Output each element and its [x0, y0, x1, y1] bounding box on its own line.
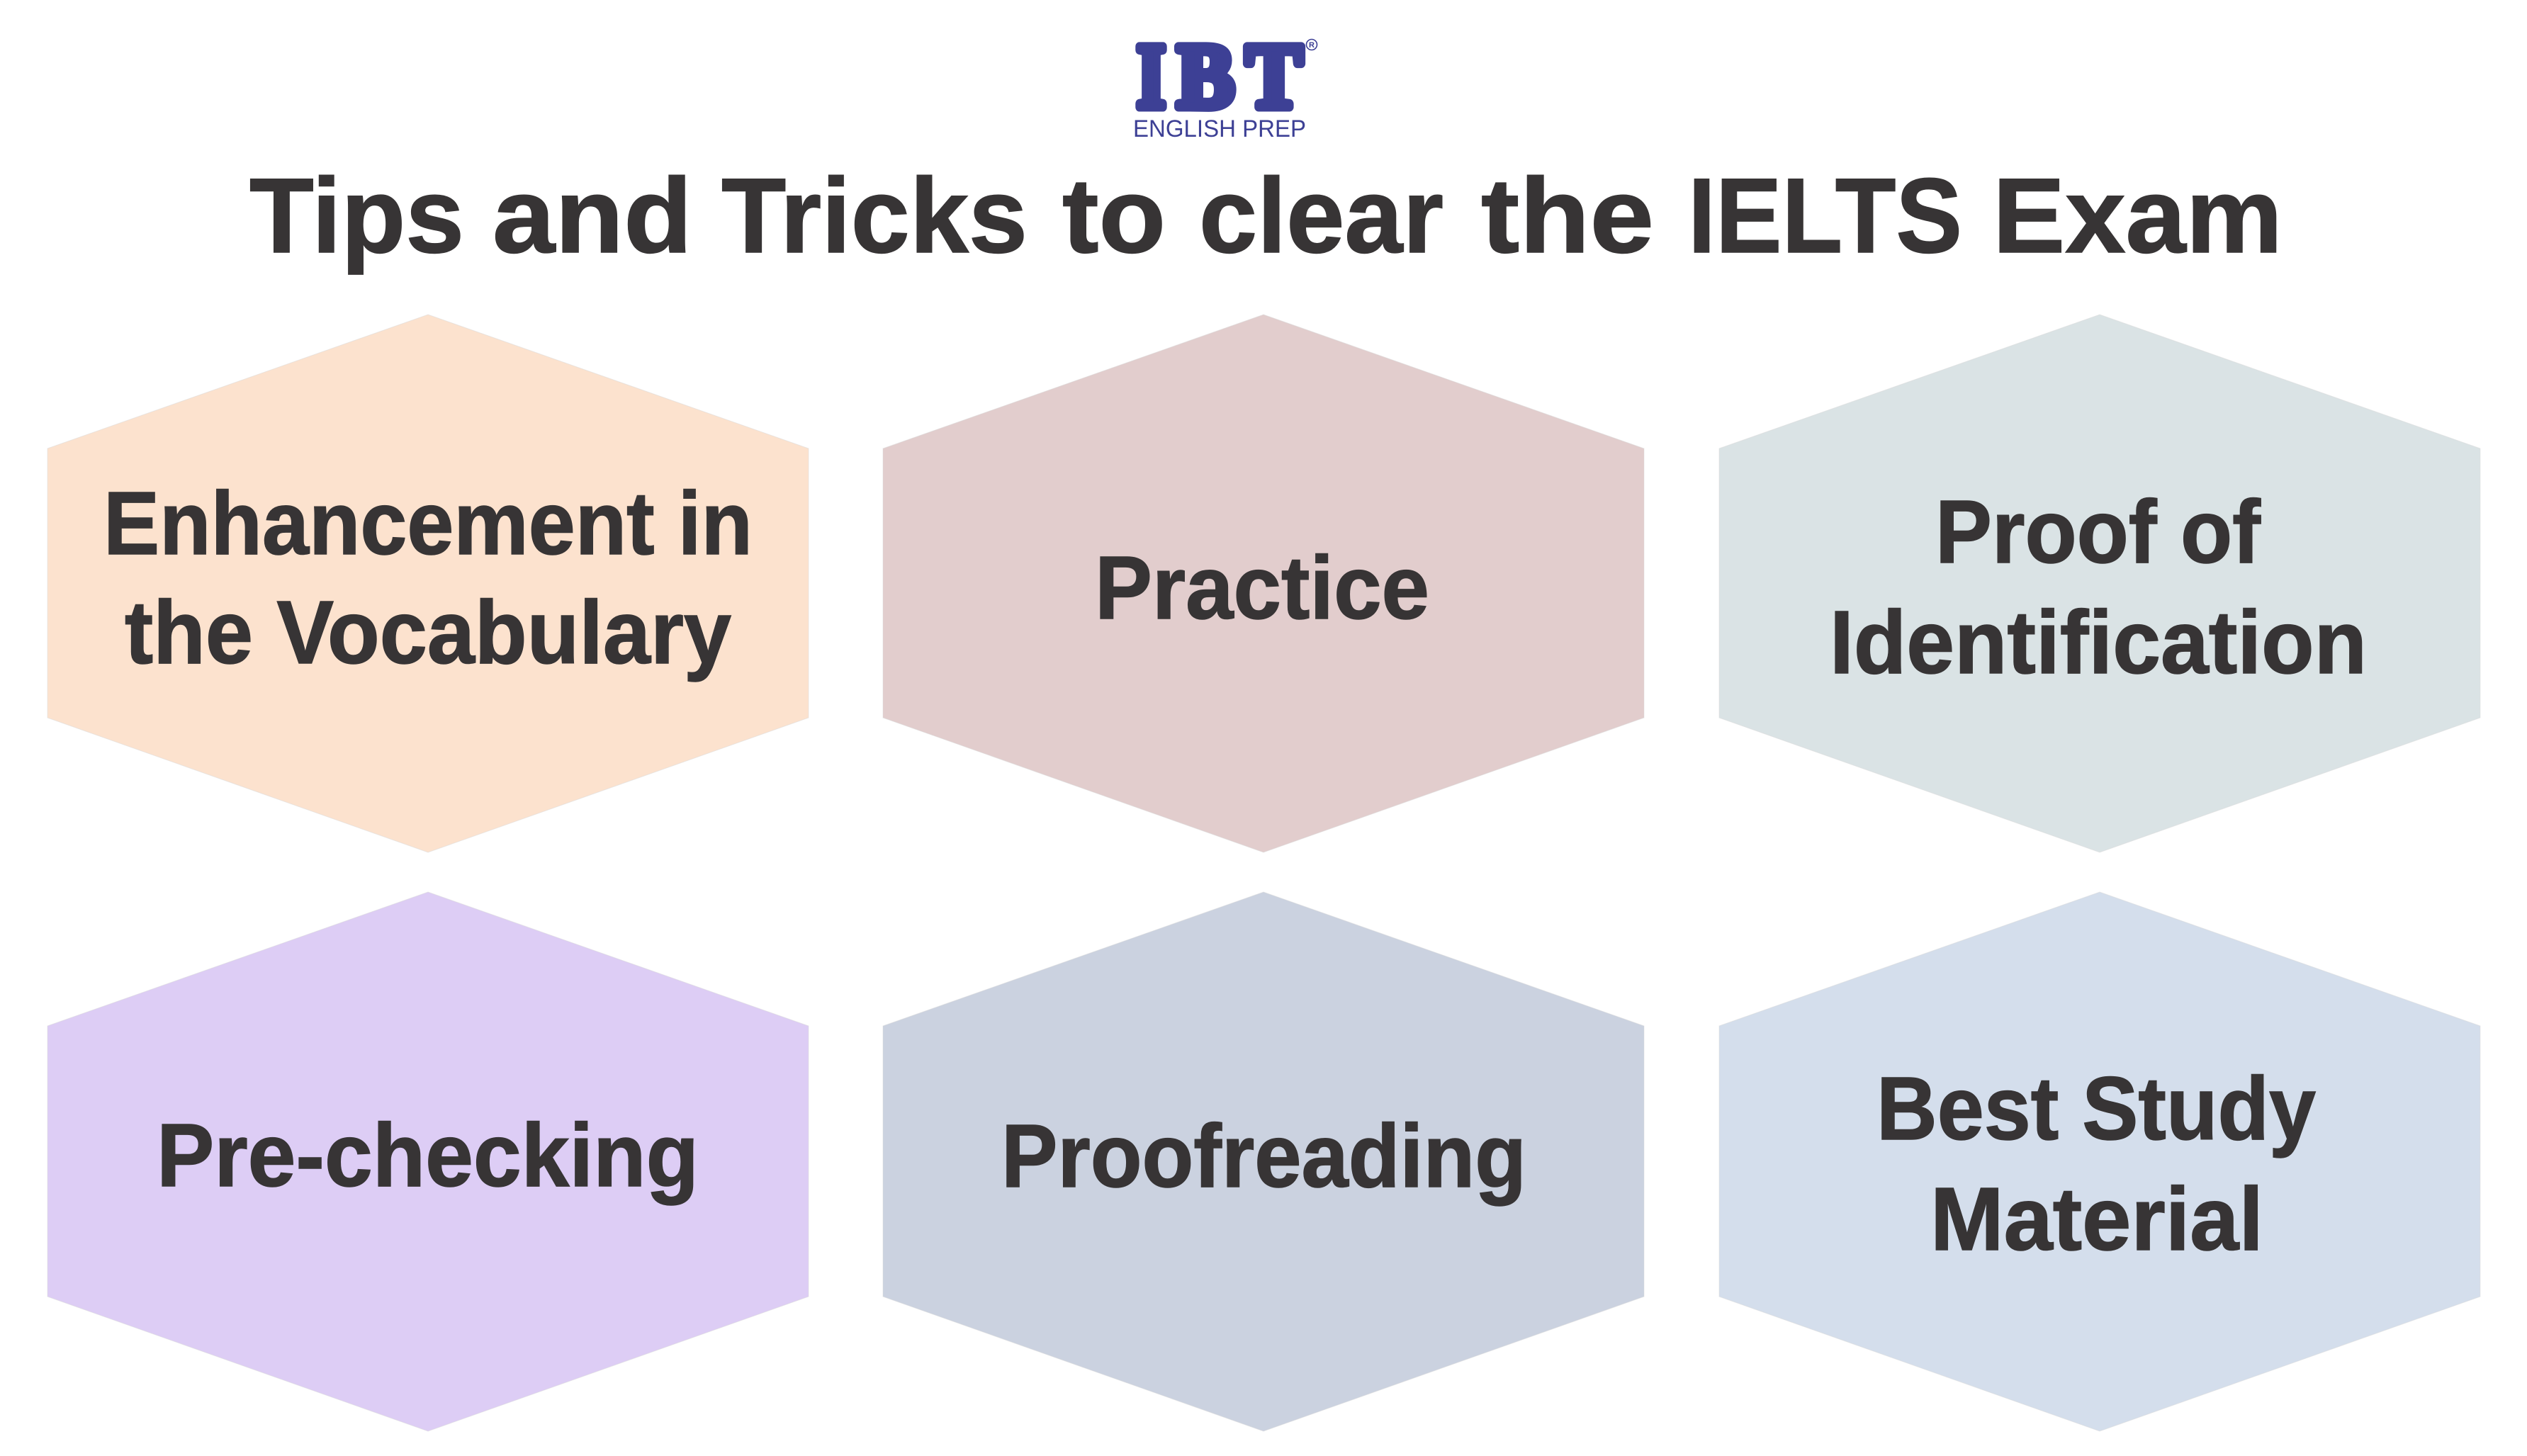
title: Tricks: [721, 156, 1028, 275]
title: Tips: [249, 156, 464, 275]
hexagon background: [1719, 892, 2480, 1431]
panel: Enhancement in the Vocabulary: [47, 315, 809, 852]
hexagon background: [47, 315, 809, 852]
logo wordmark: IBT: B: [1177, 26, 1234, 128]
label: Pre-checking: [157, 1105, 699, 1205]
panel: Best Study Material: [1719, 892, 2480, 1431]
title: Exam: [1993, 156, 2283, 275]
panel: Proofreading: [883, 892, 1644, 1431]
title: [249, 156, 2283, 275]
title: clear: [1199, 156, 1443, 275]
label: Practice: [1095, 538, 1429, 638]
logo wordmark: IBT: I: [1137, 26, 1166, 128]
panel: Practice: [883, 315, 1644, 852]
label: Proofreading: [1001, 1106, 1526, 1206]
label: Material: [1930, 1169, 2263, 1269]
title: IELTS: [1688, 156, 1962, 275]
hexagon background: [883, 892, 1644, 1431]
logo registered mark: [1307, 40, 1317, 50]
logo wordmark: IBT: [1137, 26, 1302, 128]
label: Best Study: [1876, 1059, 2316, 1158]
label: the Vocabulary: [125, 582, 731, 682]
hexagon background: [883, 315, 1644, 852]
logo wordmark: IBT: T: [1246, 26, 1302, 128]
hexagon background: [1719, 315, 2480, 852]
label: [1830, 482, 2367, 692]
label: Proof of: [1935, 482, 2261, 582]
label: [1876, 1059, 2316, 1269]
logo tagline: ENGLISH PREP: [1133, 115, 1306, 142]
panel: Proof of Identification: [1719, 315, 2480, 852]
title: to: [1062, 156, 1166, 275]
hexagon background: [47, 892, 809, 1431]
panel: Pre-checking: [47, 892, 809, 1431]
logo: IBT English Prep: [1133, 26, 1317, 142]
title: and: [493, 156, 692, 275]
label: Identification: [1830, 592, 2367, 692]
label: [103, 473, 753, 682]
logo registered mark: R: [1309, 41, 1315, 50]
label: Enhancement in: [103, 473, 753, 573]
title: the: [1481, 156, 1654, 275]
